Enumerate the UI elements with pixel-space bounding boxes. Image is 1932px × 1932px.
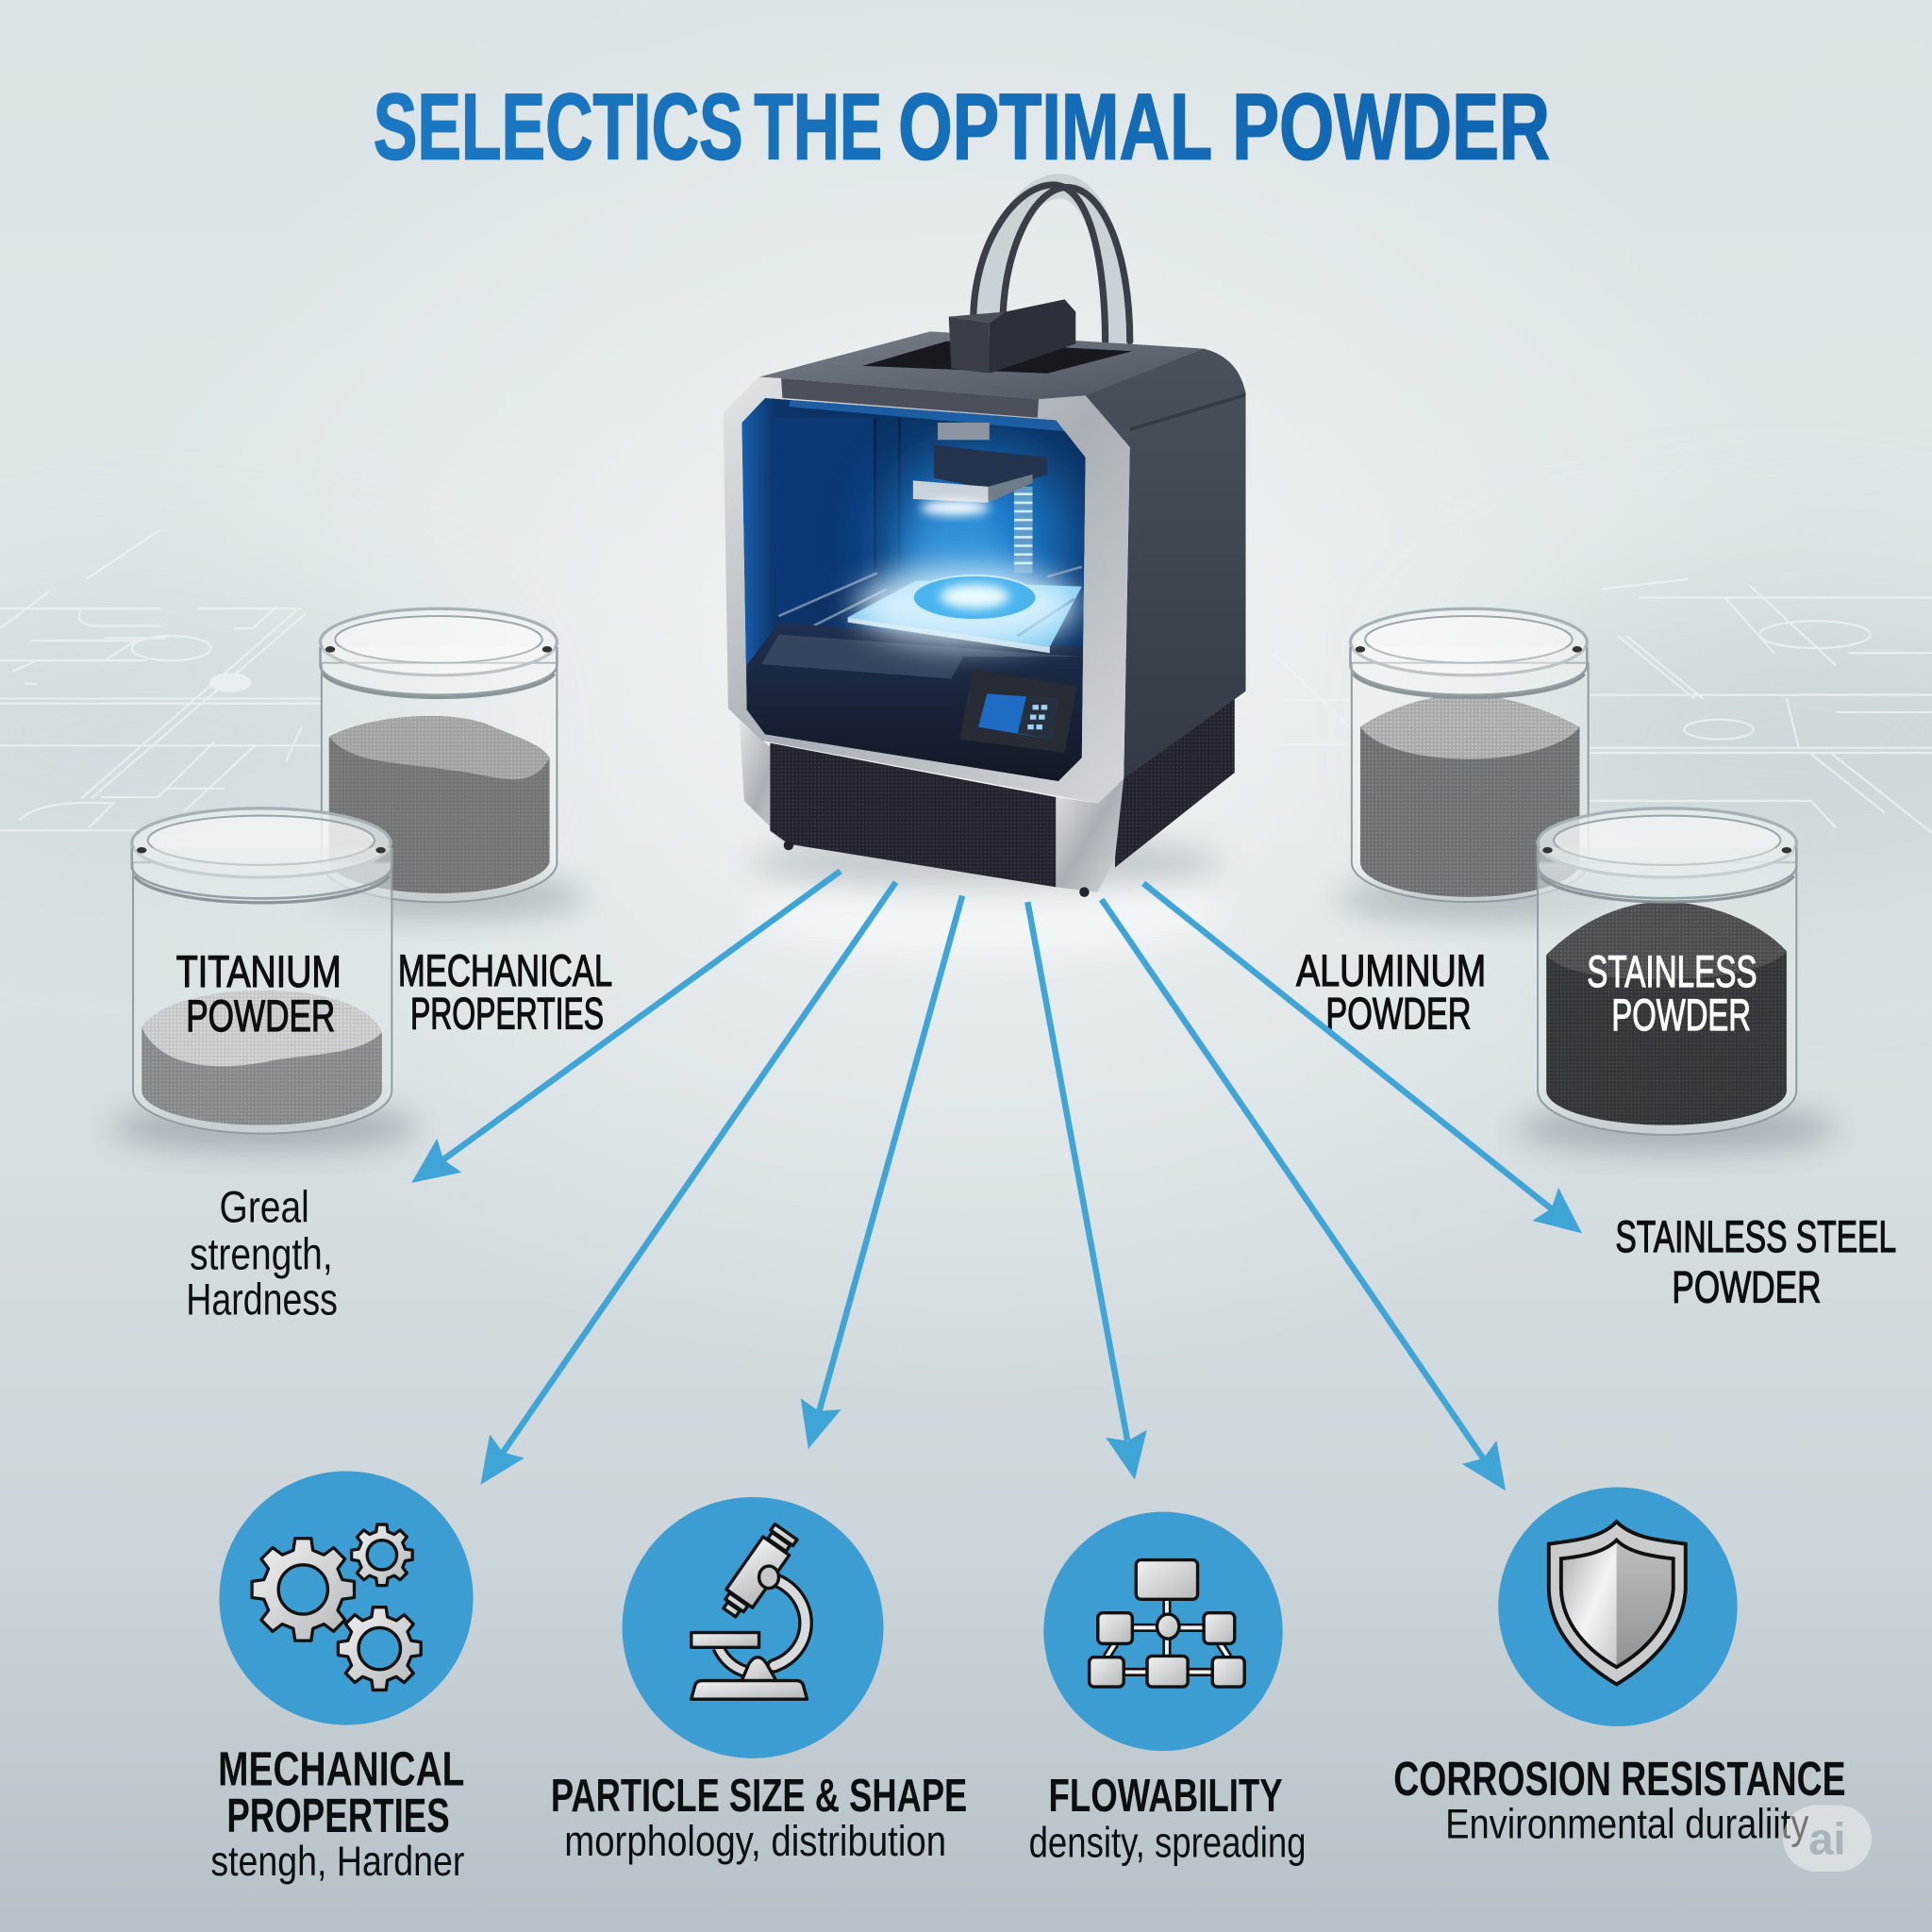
printer top (759, 331, 1245, 407)
top bright edge (789, 397, 1064, 431)
icon: shield (1549, 1522, 1686, 1684)
printed disc (913, 575, 1036, 620)
printer shadow (752, 836, 1220, 890)
powder (1360, 694, 1579, 897)
title: POWDER (1232, 75, 1550, 179)
label: stainless powder (1587, 946, 1757, 1040)
lid (321, 608, 557, 675)
panel: corrosion resistance (1393, 1487, 1846, 1848)
shelf rails (778, 567, 1082, 626)
note: great strength hardness: Greal (219, 1182, 309, 1232)
circuit pattern right (1273, 579, 1932, 833)
heading: MECHANICAL (218, 1742, 464, 1796)
printer cables (974, 185, 1130, 341)
watermark: ai (1808, 1814, 1846, 1864)
arrow 4 (1027, 902, 1147, 1480)
lower panel (747, 623, 1082, 781)
subtext: morphology, distribution (564, 1817, 946, 1865)
icon circle: flow network (1043, 1512, 1283, 1751)
label: aluminum powder (1296, 945, 1486, 1039)
heading: FLOWABILITY (1049, 1771, 1283, 1822)
printer top opening (862, 341, 1132, 374)
3D printer (724, 185, 1245, 897)
label: titanium powder: TITANIUM (176, 946, 341, 996)
heading: PARTICLE SIZE & SHAPE (551, 1771, 967, 1822)
title: THE (754, 75, 882, 179)
arrow 5 (1102, 899, 1506, 1491)
printer top bar (781, 378, 1039, 418)
icon: microscope (691, 1523, 808, 1699)
jar: back right, aluminum powder (1337, 608, 1621, 922)
arrow 1 (411, 871, 841, 1183)
label: mechanical properties (398, 945, 612, 1039)
label: aluminum powder: ALUMINUM (1296, 945, 1486, 995)
icon circle: shield (1498, 1487, 1738, 1726)
icon circle: gears (219, 1472, 474, 1725)
jar: front left, titanium powder (111, 808, 419, 1152)
powder (142, 991, 382, 1125)
lead screw (1014, 487, 1033, 573)
arrow 3 (801, 896, 962, 1449)
printer side (1086, 349, 1245, 778)
icon circle: microscope (623, 1497, 883, 1758)
arrow 2 (480, 882, 896, 1485)
note: great strength hardness (186, 1182, 338, 1324)
note: stainless steel powder: POWDER (1672, 1262, 1821, 1312)
jar labels (176, 945, 1757, 1041)
arrows (411, 871, 1582, 1491)
powder (1546, 902, 1787, 1125)
label: stainless powder: POWDER (1611, 990, 1751, 1040)
title (374, 75, 1550, 179)
powder (329, 716, 550, 893)
icon: gears (252, 1524, 421, 1690)
note: great strength hardness: strength, (190, 1228, 333, 1278)
lid (1538, 808, 1796, 877)
subtext: density, spreading (1029, 1818, 1306, 1866)
heading: PROPERTIES (226, 1789, 450, 1842)
light plate (913, 480, 989, 503)
note: stainless steel powder (1615, 1211, 1896, 1312)
arrow 6 (1143, 883, 1582, 1233)
label: titanium powder: POWDER (186, 991, 335, 1041)
printer base (740, 689, 1245, 897)
lid (1351, 608, 1587, 675)
note: great strength hardness: Hardness (186, 1274, 338, 1324)
subtext: Environmental duraliity (1445, 1802, 1809, 1848)
label: mechanical properties: MECHANICAL (398, 945, 612, 995)
label: stainless powder: STAINLESS (1587, 946, 1757, 996)
printer chamber (741, 397, 1086, 781)
heading (218, 1742, 464, 1842)
label: titanium powder (176, 946, 341, 1041)
printer head block (949, 299, 1075, 374)
lid (132, 808, 391, 877)
icon: flow network (1090, 1560, 1244, 1687)
panel: particle size and shape (551, 1497, 967, 1865)
panel: mechanical properties (210, 1472, 474, 1885)
subtext: stengh, Hardner (210, 1839, 465, 1885)
floor reflection (752, 869, 1220, 955)
label: mechanical properties: PROPERTIES (410, 989, 604, 1039)
title: SELECTICS (374, 75, 743, 179)
printer front frame (724, 377, 1130, 804)
carriage block (934, 445, 1047, 491)
carriage rail (938, 423, 990, 440)
label: aluminum powder: POWDER (1325, 989, 1472, 1039)
watermark (1783, 1805, 1872, 1872)
jar: front right, stainless powder (1516, 808, 1836, 1154)
build plate (848, 580, 1082, 647)
jar: back left, mechanical powder (311, 608, 588, 919)
circuit pattern left (0, 530, 323, 830)
panel: flowability (1029, 1512, 1306, 1866)
title: OPTIMAL (898, 75, 1212, 179)
touch screen (959, 669, 1077, 753)
